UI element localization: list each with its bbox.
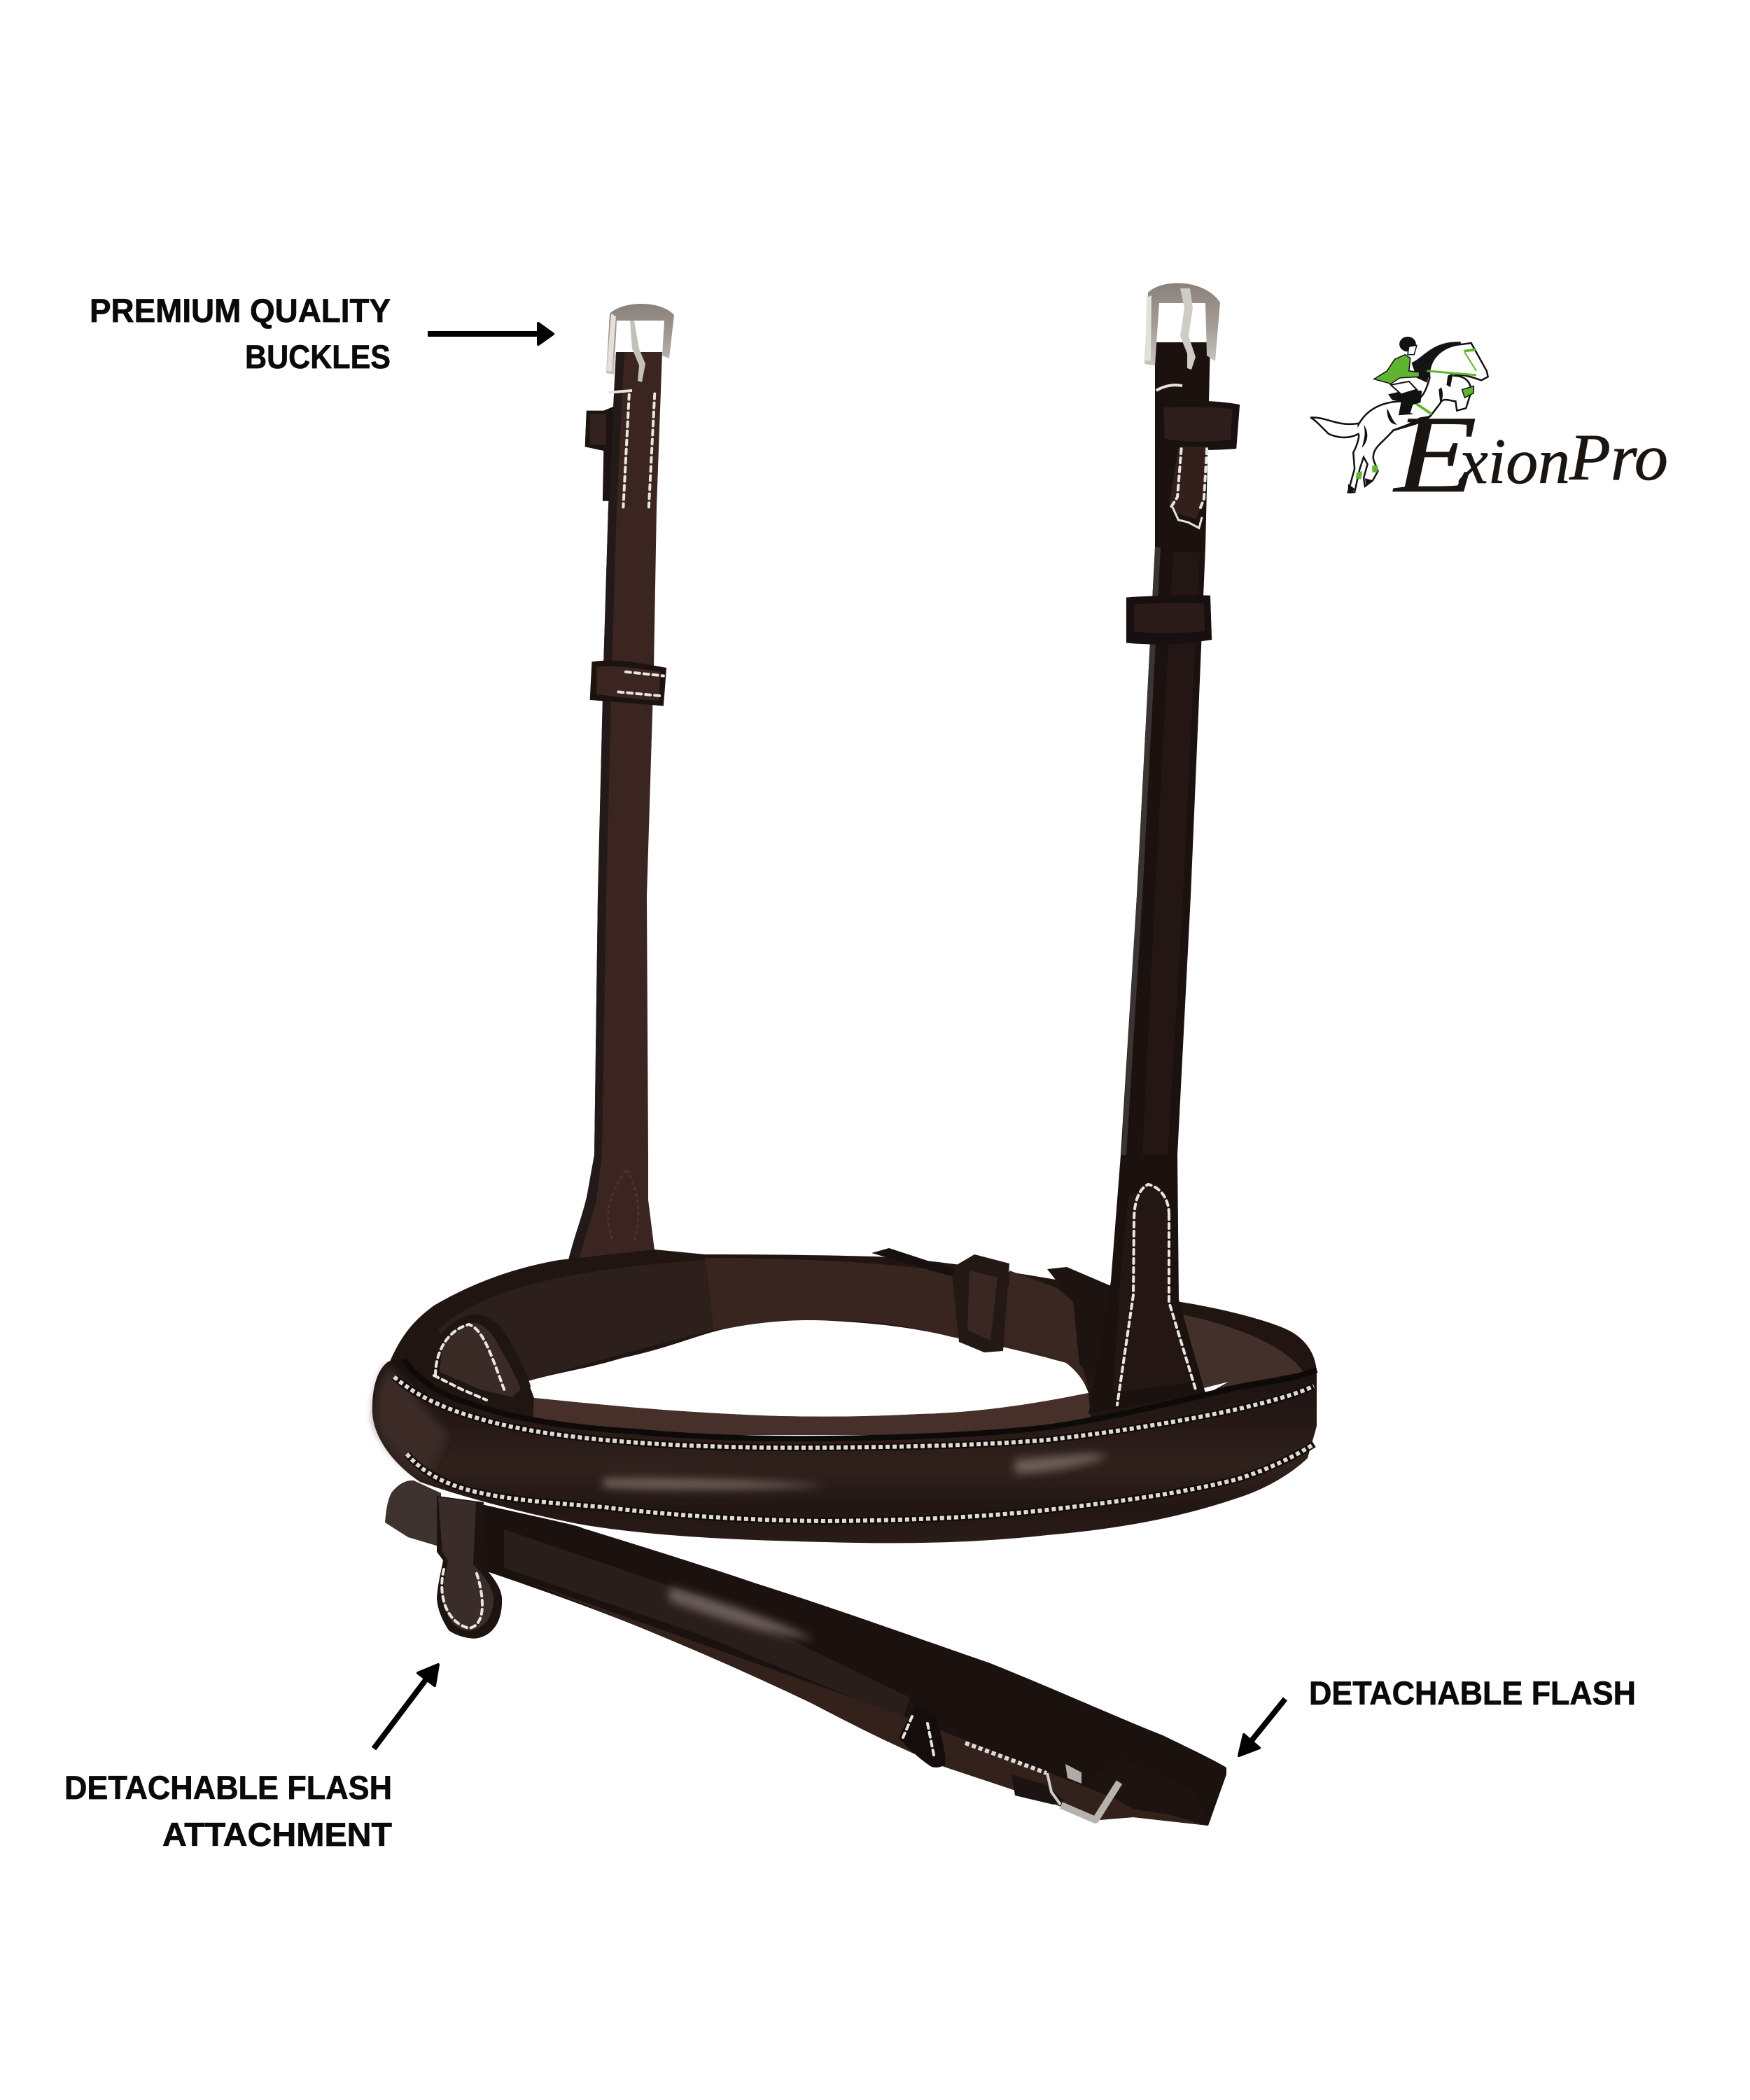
leather highlights [603,1454,1106,1490]
flash strap mid panel [504,1530,910,1718]
back keeper and buckle [872,1248,1114,1374]
top rim line [404,1359,1317,1438]
label: premium quality buckles: BUCKLES [245,338,391,375]
detachable flash attachment loop [437,1496,502,1639]
right upper keeper [1156,385,1240,450]
right cheek strap [1088,342,1210,1414]
left buckle keeper [585,407,613,501]
right lower keeper [1126,595,1212,645]
noseband product photo [372,283,1317,1826]
flash strap body [472,1502,1226,1826]
padded felt lining [532,1393,1092,1435]
label: premium quality buckles: PREMIUM QUALITY [90,292,391,329]
icon: flash strap buckle [1011,1764,1119,1820]
label: premium quality buckles [90,292,391,375]
flash strap end panel [1085,1757,1211,1820]
logo wordmark: Pro [1569,421,1668,494]
back of noseband ring [388,1250,1317,1428]
left shoulder of front band [375,1365,448,1477]
left strap stitching [608,391,654,507]
label: detachable flash attachment: DETACHABLE FLASH [64,1769,392,1806]
right strap tip stitching [1170,447,1208,528]
upper stitching [394,1377,1314,1448]
flash strap end loop [385,1480,441,1547]
icon: left buckle [606,304,674,382]
left lower keeper [590,660,666,706]
upper strap details [585,385,1240,706]
left cheek strap [568,352,662,1260]
icon: right buckle [1144,283,1220,370]
front noseband [372,1358,1317,1543]
flash strap keeper [899,1707,945,1768]
arrow: to flash strap [1239,1699,1285,1756]
flash attachment tab on noseband [433,1314,531,1405]
arrow: to flash attachment [374,1665,438,1749]
opening right of cheek tab [1198,1382,1228,1397]
logo wordmark [1393,393,1668,516]
logo wordmark: E [1393,393,1477,516]
arrow: to buckle [428,323,553,344]
label: detachable flash attachment [64,1769,392,1853]
icon: jumping horse and rider [1310,337,1488,493]
flash strap highlight [669,1587,814,1639]
flash strap lower brown face [532,1583,1208,1826]
logo wordmark: xion [1458,426,1570,497]
logo: ExionPro [1310,337,1668,516]
label: detachable flash: DETACHABLE FLASH [1309,1674,1636,1712]
flash strap stitching [965,1743,1046,1773]
lower stitching [407,1444,1314,1521]
flash strap [385,1480,1226,1826]
inner opening of ring [528,1320,1088,1417]
label: detachable flash attachment: ATTACHMENT [162,1816,392,1853]
